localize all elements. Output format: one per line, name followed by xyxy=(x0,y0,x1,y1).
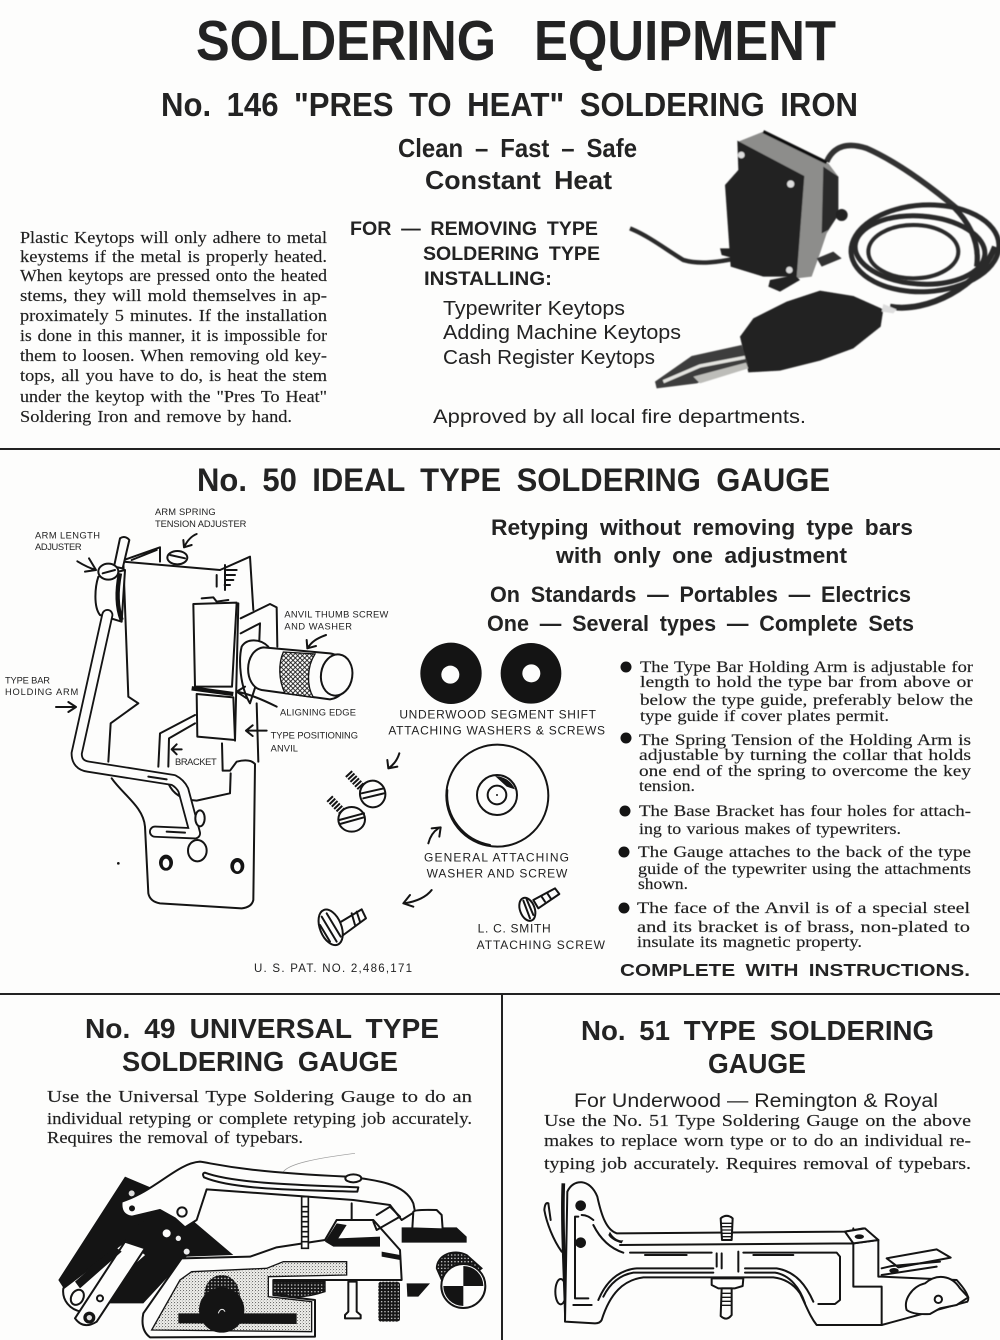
label: underwood attachments: UNDERWOOD SEGMENT SHIFT xyxy=(399,707,597,721)
icon: general screw xyxy=(314,890,432,949)
bullet list: gauge features: The Gauge attaches to the back of the type xyxy=(638,844,971,861)
illustration: gauge with callouts xyxy=(5,507,389,908)
divider: section rule upper xyxy=(0,448,1000,450)
callouts: part labels and arrows xyxy=(5,507,389,767)
gauge drawing xyxy=(77,537,355,908)
title: EQUIPMENT xyxy=(534,9,836,73)
lower body xyxy=(142,1220,402,1337)
text block: keytop instructions: under the keytop with the "Pres To Heat" xyxy=(20,387,327,406)
text block: uses list: INSTALLING: xyxy=(424,269,552,290)
bullet list: gauge features: The Type Bar Holding Arm is adjustable for xyxy=(640,659,974,676)
bullet list: gauge features: insulate its magnetic property. xyxy=(637,934,862,951)
subheading: retyping: Retyping without removing type bars xyxy=(491,515,913,540)
callouts: part labels and arrows: TYPE POSITIONING xyxy=(271,731,358,741)
callouts: part labels and arrows: AND WASHER xyxy=(284,621,352,631)
icon: L. C. Smith screw xyxy=(516,888,559,923)
lever arms xyxy=(63,1240,147,1312)
panel: No. 49 universal gauge xyxy=(47,1013,485,1337)
label: general attaching: GENERAL ATTACHING xyxy=(424,851,569,865)
text block: No. 49 description: Requires the removal of typebars. xyxy=(47,1128,303,1147)
divider: section rule lower xyxy=(0,993,1000,995)
bullet list: gauge features: The Base Bracket has four holes for attach- xyxy=(639,803,971,820)
patent number: U. S. PAT. NO. 2,486,171 xyxy=(254,963,412,975)
text block: keytop instructions: When keytops are pressed onto the heated xyxy=(20,266,328,285)
panel: No. 51 type soldering gauge xyxy=(544,1015,971,1325)
text block: uses list: Typewriter Keytops xyxy=(443,297,625,320)
text block: keytop instructions: keystems if the metal is properly heated. xyxy=(20,247,327,266)
subheading: standards: One — Several types — Complete Sets xyxy=(487,611,914,636)
bullet list: gauge features: guide of the typewriter using the attachments xyxy=(638,861,971,878)
text block: keytop instructions: tops, all you have to do, is heat the stem xyxy=(20,366,327,385)
text block: No. 49 description: individual retyping or complete retyping job accurately. xyxy=(47,1109,472,1128)
complete with instructions: COMPLETE WITH INSTRUCTIONS. xyxy=(620,960,970,980)
illustration: No. 51 gauge xyxy=(544,1182,968,1325)
heading: No. 49 xyxy=(85,1013,439,1077)
label: L. C. Smith xyxy=(477,922,606,952)
bullet list: gauge features: tension. xyxy=(639,778,695,795)
panel: No. 146 soldering iron xyxy=(20,86,1000,428)
text block: No. 49 description: Use the Universal Type Soldering Gauge to do an xyxy=(47,1087,472,1106)
text block: No. 51 description: Use the No. 51 Type Soldering Gauge on the above xyxy=(544,1111,971,1130)
subheading: standards: On Standards — Portables — Electrics xyxy=(490,582,911,607)
callouts: part labels and arrows: BRACKET xyxy=(175,757,217,767)
label: underwood attachments xyxy=(388,707,605,737)
text block: uses list: SOLDERING TYPE xyxy=(423,244,600,265)
right plate xyxy=(402,1227,467,1243)
illustration: universal gauge xyxy=(58,1153,485,1337)
bullet list: gauge features: adjustable by turning the collar that holds xyxy=(639,747,971,764)
bullet list: gauge features xyxy=(618,659,974,951)
subheading: clean fast safe constant heat: Constant Heat xyxy=(425,165,612,195)
text block: keytop instructions xyxy=(20,228,328,426)
text block: uses list xyxy=(350,219,681,369)
bullet list: gauge features: one end of the spring to overcome the key xyxy=(639,763,971,780)
text block: No. 49 description xyxy=(47,1087,472,1147)
callouts: part labels and arrows: ARM SPRING xyxy=(155,507,216,517)
heading: No. 49: No. 49 UNIVERSAL TYPE xyxy=(85,1013,439,1044)
label: general attaching xyxy=(424,851,569,880)
heading: No. 51: No. 51 TYPE SOLDERING xyxy=(581,1015,934,1046)
title: SOLDERING xyxy=(196,9,496,73)
text block: keytop instructions: proximately 5 minutes. If the installation xyxy=(20,306,327,325)
icon: general washer xyxy=(428,745,548,847)
subheading: standards xyxy=(487,582,914,636)
bullet list: gauge features: The face of the Anvil is of a special steel xyxy=(637,900,970,917)
bullet list: gauge features: type guide if cover plates permit. xyxy=(640,708,889,725)
label: L. C. Smith: ATTACHING SCREW xyxy=(477,938,606,952)
callouts: part labels and arrows: ADJUSTER xyxy=(35,542,82,552)
text block: keytop instructions: Plastic Keytops will only adhere to metal xyxy=(20,228,327,247)
divider: vertical column rule xyxy=(501,994,503,1340)
bullet list: gauge features: and its bracket is of brass, non-plated to xyxy=(637,919,970,936)
callouts: part labels and arrows: ARM LENGTH xyxy=(35,530,100,540)
text block: No. 51 description: makes to replace worn type or to do an individual re- xyxy=(544,1131,971,1150)
callouts: part labels and arrows: TYPE BAR xyxy=(5,675,50,685)
text block: keytop instructions: is done in this manner, it is impossible for xyxy=(20,326,328,345)
callouts: part labels and arrows: ANVIL THUMB SCREW xyxy=(284,609,389,619)
text block: No. 51 description xyxy=(544,1111,971,1173)
heading: No. 146: No. 146 "PRES TO HEAT" SOLDERING IRON xyxy=(161,86,858,123)
label: general attaching: WASHER AND SCREW xyxy=(427,866,568,880)
title xyxy=(196,9,836,73)
bullet list: gauge features: length to hold the type bar from above or xyxy=(640,674,974,691)
text block: uses list: Cash Register Keytops xyxy=(443,346,655,369)
subheading: clean fast safe constant heat xyxy=(398,133,637,195)
text block: No. 51 description: typing job accurately. Requires removal of typebars. xyxy=(544,1154,971,1173)
callouts: part labels and arrows: TENSION ADJUSTER xyxy=(155,519,247,529)
label: L. C. Smith: L. C. SMITH xyxy=(478,922,551,936)
subheading: retyping: with only one adjustment xyxy=(555,543,848,568)
bullet list: gauge features: The Spring Tension of the Holding Arm is xyxy=(639,732,971,749)
subheading: clean fast safe constant heat: Clean – Fast – Safe xyxy=(398,133,637,163)
label: underwood attachments: ATTACHING WASHERS & SCREWS xyxy=(388,723,605,737)
heading: No. 49: SOLDERING GAUGE xyxy=(122,1046,398,1077)
panel: No. 50 ideal type soldering gauge xyxy=(5,462,974,980)
text block: keytop instructions: Soldering Iron and remove by hand. xyxy=(20,407,292,426)
heading: No. 51: GAUGE xyxy=(708,1048,806,1079)
callouts: part labels and arrows: ANVIL xyxy=(271,743,298,753)
heading: No. 51 xyxy=(581,1015,934,1079)
bullet list: gauge features: below the type guide, preferably below the xyxy=(640,692,973,709)
text block: keytop instructions: them to loosen. When removing old key- xyxy=(20,346,327,365)
icon: underwood screws xyxy=(329,753,399,832)
illustration: washers and screws xyxy=(314,643,606,952)
icon: underwood washers xyxy=(420,643,561,704)
text block: keytop instructions: stems, they will mold themselves in ap- xyxy=(20,286,327,305)
callouts: part labels and arrows: HOLDING ARM xyxy=(5,687,78,697)
upper jaw xyxy=(121,1162,415,1227)
photo: soldering iron and transformer xyxy=(630,132,1000,388)
subheading: makes: For Underwood — Remington & Royal xyxy=(574,1091,938,1112)
text block: uses list: Adding Machine Keytops xyxy=(443,321,681,344)
bullet list: gauge features: shown. xyxy=(638,876,688,893)
heading: No. 50: No. 50 IDEAL TYPE SOLDERING GAUGE xyxy=(197,462,830,498)
approval note: Approved by all local fire departments. xyxy=(433,406,806,428)
subheading: retyping xyxy=(491,515,913,568)
text block: uses list: FOR — REMOVING TYPE xyxy=(350,219,598,240)
callouts: part labels and arrows: ALIGNING EDGE xyxy=(280,707,356,717)
bullet list: gauge features: ing to various makes of typewriters. xyxy=(639,821,901,838)
